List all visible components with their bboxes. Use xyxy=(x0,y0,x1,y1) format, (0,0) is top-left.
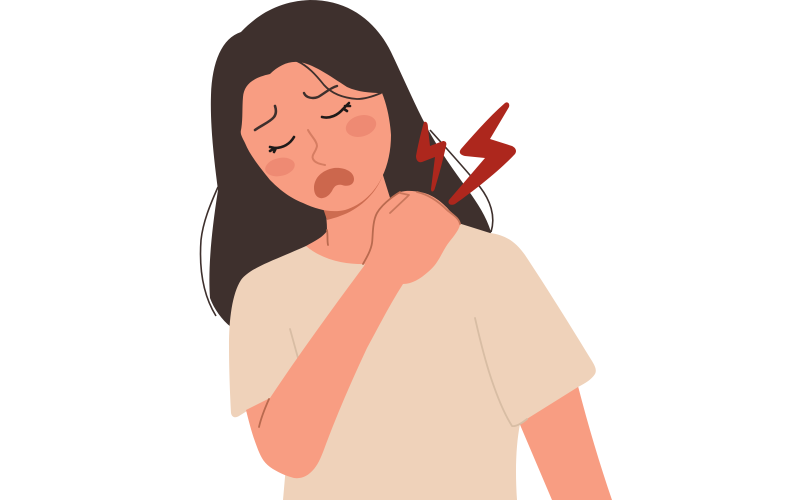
neck xyxy=(306,172,400,264)
shirt fold: sleeve seam xyxy=(475,318,527,426)
neck shadow under chin xyxy=(323,177,382,220)
closed eye: right xyxy=(322,103,350,118)
eyebrow: left xyxy=(255,106,276,130)
nose xyxy=(308,130,325,165)
forearm and fist xyxy=(246,191,460,478)
fist outline xyxy=(417,192,460,224)
finger lines xyxy=(390,193,409,213)
closed eye: left xyxy=(270,137,294,152)
wrist line xyxy=(363,192,400,264)
right arm xyxy=(518,386,612,500)
loose hair strand: left xyxy=(201,187,218,316)
face xyxy=(241,61,391,211)
eyebrow: right xyxy=(304,86,337,98)
pain bolt: small xyxy=(416,122,446,192)
forehead hair strand xyxy=(297,61,381,99)
elbow line xyxy=(259,399,269,427)
blush: left cheek xyxy=(263,155,297,179)
loose hair strand: right xyxy=(430,130,493,232)
shirt fold: left sleeve xyxy=(290,329,298,358)
t-shirt xyxy=(229,222,596,500)
hair xyxy=(201,0,493,327)
pain bolt: large xyxy=(448,102,516,205)
blush: right cheek xyxy=(343,112,379,140)
open mouth xyxy=(314,168,354,198)
neck line xyxy=(327,230,328,245)
